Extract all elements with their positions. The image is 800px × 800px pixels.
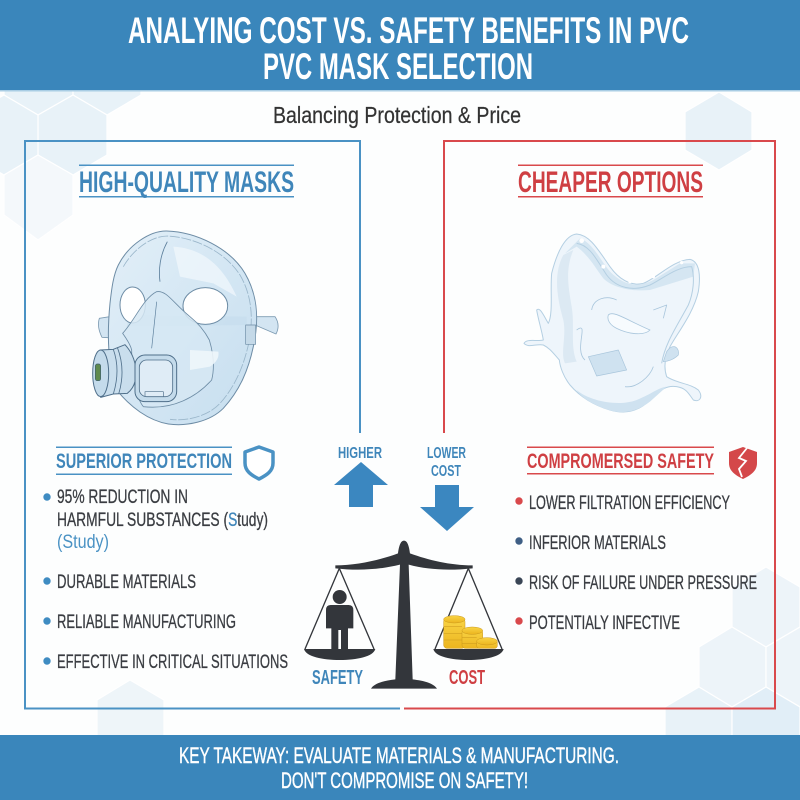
- icon: deformed cheap mask illustration: [524, 234, 701, 412]
- arrow: down: [420, 485, 474, 531]
- panel: high-quality masks: [25, 141, 400, 708]
- benefits list: RELIABLE MANUFACTURING: [57, 612, 236, 633]
- panel: cheaper options: [404, 141, 775, 708]
- drawbacks list: [515, 493, 757, 634]
- label: higher: HIGHER: [338, 445, 382, 462]
- key takeaway banner: DON'T COMPROMISE ON SAFETY!: [281, 768, 528, 793]
- label: safety: SAFETY: [312, 667, 363, 689]
- beam and stand: [335, 541, 473, 689]
- subtitle: Balancing Protection & Price: [273, 102, 521, 128]
- subheading: compromised safety: COMPROMERSED SAFETY: [527, 449, 714, 473]
- drawbacks list: INFERIOR MATERIALS: [529, 533, 666, 554]
- strings: [305, 568, 502, 649]
- label: lower cost: COST: [431, 463, 461, 480]
- benefits list: (Study): [57, 532, 109, 553]
- filter cartridge: [100, 345, 136, 397]
- key takeaway banner: [0, 735, 800, 800]
- balance scale: [304, 541, 504, 689]
- title banner: PVC MASK SELECTION: [263, 46, 533, 87]
- icon: person: [326, 590, 353, 649]
- icon: coin stacks: [444, 616, 497, 648]
- icon: high-quality mask illustration: [93, 231, 278, 425]
- benefits list: EFFECTIVE IN CRITICAL SITUATIONS: [57, 652, 288, 673]
- key takeaway banner: KEY TAKEWAY: EVALUATE MATERIALS & MANUFACTURING.: [179, 743, 619, 768]
- subheading: superior protection: SUPERIOR PROTECTION: [56, 449, 232, 473]
- icon: broken shield: [729, 447, 757, 479]
- benefits list: [43, 487, 288, 673]
- benefits list: DURABLE MATERIALS: [57, 572, 196, 593]
- pans: [304, 649, 375, 660]
- heading: high-quality masks: HIGH-QUALITY MASKS: [79, 166, 294, 199]
- title banner: [0, 0, 800, 92]
- label: lower cost: LOWER: [427, 445, 466, 462]
- icon: shield: [245, 447, 273, 479]
- benefits list: 95% REDUCTION IN: [57, 487, 188, 508]
- arrow: up: [334, 462, 388, 507]
- benefits list: HARMFUL SUBSTANCES (Study): [57, 510, 268, 531]
- heading: cheaper options: CHEAPER OPTIONS: [518, 166, 703, 199]
- drawbacks list: POTENTIALY INFECTIVE: [529, 613, 680, 634]
- label: cost: COST: [449, 667, 485, 689]
